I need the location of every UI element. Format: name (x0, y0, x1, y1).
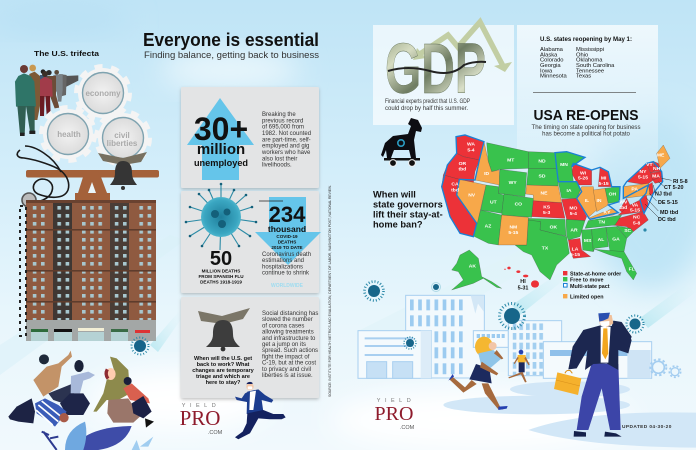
state labels: UT (490, 199, 497, 205)
question: when will state governors: home ban? (373, 220, 423, 230)
callouts: northeast states: CT 5-20 (664, 185, 683, 191)
state labels: ID (484, 171, 490, 177)
state labels: TX (542, 245, 549, 251)
text: question (192, 356, 255, 386)
state labels: IL (585, 198, 589, 204)
state labels: GA (612, 236, 620, 242)
arrow: up (187, 98, 254, 180)
state labels: tbd (458, 167, 466, 173)
logo: Yield Pro left: PRO (180, 406, 220, 430)
low building (358, 331, 431, 378)
panel: states reopening (517, 25, 658, 180)
text: social distancing (262, 311, 318, 379)
state labels: MO (569, 205, 577, 211)
text: social distancing: slowed the number (262, 317, 313, 323)
GDP dollar letters: GDP (385, 30, 486, 109)
text: record: workers who have (261, 150, 311, 156)
text: GDP forecast: Financial experts predict that U.S. GDP (385, 99, 470, 105)
callouts: northeast states: RI 5-8 (673, 179, 688, 185)
gears (650, 359, 681, 377)
text: social distancing: fight the impact of (262, 354, 310, 360)
illustration: businessman with briefcase (554, 313, 632, 437)
panel: deaths (181, 183, 321, 293)
list: states column 1: Minnesota (540, 74, 568, 80)
state labels: AZ (485, 224, 491, 230)
green states (473, 143, 637, 280)
state labels: VA (632, 202, 639, 208)
logo: Yield Pro right: YIELD (377, 398, 415, 404)
state labels: WA (467, 142, 475, 148)
list: states column 1: Iowa (540, 68, 553, 74)
panel: when back to work (181, 297, 319, 398)
state labels: ND (538, 159, 546, 165)
virus (432, 282, 440, 292)
state labels: WY (509, 180, 517, 186)
panel: 30+ million unemployed (181, 87, 319, 188)
briefcase (554, 370, 581, 395)
subtitle: timing: The timing on state opening for business (532, 125, 640, 131)
icon: stethoscope (17, 146, 69, 207)
text: record: are part-time, self- (262, 137, 311, 143)
gears: economy, health, civil liberties (42, 66, 150, 164)
heading: USA re-opens: USA RE-OPENS (534, 107, 638, 124)
state labels: tbd (451, 188, 459, 194)
mid building (473, 321, 562, 376)
stat: 50 million: 50 (210, 248, 232, 270)
illustration: background woman (508, 350, 530, 382)
stat: 234 thousand: 234 (269, 202, 306, 227)
source note: SOURCE: INSTITUTE FOR HEALTH METRICS AND EVALUATION, DEPARTMENT OF LABOR, WASHINGTON POST, NATIONAL REVIEW. (328, 185, 332, 397)
callouts: northeast states: NJ tbd (655, 192, 672, 198)
illustration: queue of workers (15, 65, 78, 136)
state labels: 5-4 (467, 147, 475, 153)
text: social distancing: Social distancing has (262, 311, 318, 317)
state labels: ME (657, 153, 665, 159)
text: question: triage and which are (196, 374, 250, 380)
list: states column 1: Colorado (540, 58, 564, 64)
state labels: SD (539, 173, 546, 179)
question: when will state governors (373, 190, 443, 230)
orange states (457, 142, 670, 245)
panel: deaths: MILLION DEATHS (202, 268, 240, 274)
label: worldwide: WORLDWIDE (271, 283, 304, 289)
updated date: UPDATED 04-30-20 (622, 424, 672, 430)
red states (442, 135, 663, 258)
virus (364, 282, 384, 300)
callout leader lines (645, 178, 672, 217)
callouts: northeast states: MD tbd (660, 210, 678, 216)
state labels: AR (570, 228, 578, 234)
state labels: NC (633, 215, 641, 221)
state labels: KS (543, 204, 551, 210)
state labels: SC (624, 228, 632, 234)
state labels: 5-26 (578, 176, 588, 182)
list: states column 2: South Carolina (576, 63, 615, 69)
state labels: 5-15 (599, 181, 609, 187)
legend: stay at home: State-at-home order (570, 272, 622, 278)
viruses: floating (364, 228, 647, 349)
building (20, 200, 156, 341)
text: coronavirus estimates: continue to shrink (262, 271, 310, 277)
legend: free to move: Free to move (570, 278, 604, 284)
text: social distancing: liberties is at issue. (262, 373, 313, 379)
virus (500, 304, 524, 328)
text: record: previous record (262, 118, 303, 124)
title: Everyone is essential (143, 30, 319, 50)
panel: states reopening: has become a political hot potato (542, 132, 631, 138)
state labels: 5-15 (570, 252, 580, 258)
state labels: 5-15 (638, 175, 648, 181)
state labels: IA (566, 188, 572, 194)
text: question: here to stay? (206, 380, 241, 386)
virus (643, 228, 647, 232)
illustration: city buildings (358, 295, 696, 448)
callouts: northeast states: DE 5-15 (658, 200, 678, 206)
text: coronavirus estimates: hospitalizations (262, 264, 303, 270)
heading: the U.S. trifecta: The U.S. trifecta (34, 49, 100, 58)
logo: Yield Pro left: .COM (208, 430, 223, 436)
state labels: NM (509, 224, 517, 230)
state labels: MI (601, 175, 607, 181)
state labels: MS (584, 238, 592, 244)
logo: Yield Pro right (375, 398, 415, 431)
icon: small virus by building (132, 338, 148, 354)
text: question: changes are temporary (192, 368, 255, 374)
state labels: 5-4 (570, 211, 577, 217)
tall building (406, 295, 484, 378)
subtitle: Finding balance, getting back to business (144, 50, 319, 61)
state labels: AL (598, 237, 604, 243)
legend: limited open: Limited open (570, 294, 604, 300)
panel: deaths: DEATHS (278, 240, 296, 244)
panel: 30+ million unemployed: million (197, 141, 245, 158)
list: states column 1: Georgia (540, 63, 561, 69)
logo: Yield Pro right: .COM (400, 425, 415, 431)
state labels: CO (515, 202, 522, 208)
text: record: livelihoods. (262, 163, 292, 169)
gear: economy: economy (85, 89, 121, 98)
gear: health: health (57, 130, 81, 139)
logo: Yield Pro left (180, 403, 223, 436)
state labels: LA (572, 247, 579, 253)
state labels: MN (560, 162, 568, 168)
gear: civil liberties: civil (114, 131, 130, 140)
state labels: MT (507, 158, 514, 164)
text: record (261, 112, 311, 169)
text: coronavirus estimates (262, 252, 311, 277)
text: record: Breaking the (262, 112, 296, 118)
list: states column 1: Alaska (540, 52, 558, 58)
text: coronavirus estimates: Coronavirus death (262, 252, 311, 258)
map: USA states (442, 135, 672, 290)
panel: deaths: thousand (268, 224, 306, 234)
question: when will state governors: When will (373, 190, 416, 200)
text: record: 1982. Not counted (262, 131, 311, 137)
text: social distancing: C-19, but at the cost (262, 361, 316, 367)
icon: coronavirus (185, 183, 257, 250)
logo: Yield Pro left: YIELD (182, 403, 220, 409)
text: social distancing: to privacy and civil (262, 367, 311, 373)
gear: civil liberties: liberties (107, 139, 138, 148)
decorative handshake (388, 62, 486, 73)
text: coronavirus estimates: estimations and (262, 258, 304, 264)
panel: GDP: could drop by half this summer. (385, 106, 468, 112)
logo: Yield Pro right: PRO (375, 403, 413, 425)
Hawaii (504, 267, 539, 288)
list: states column 2: Mississippi (576, 47, 604, 53)
panel: deaths: DEATHS 1918-1919 (200, 280, 242, 284)
state labels: WI (580, 170, 587, 176)
panel: deaths: COVID-19 (276, 234, 298, 239)
icon: trojan horse (381, 118, 422, 166)
stat: 30+: 30+ (194, 111, 248, 147)
state labels: MA (652, 174, 660, 180)
text: record: of 695,000 from (262, 125, 304, 131)
list: states column 2: Ohio (576, 52, 588, 58)
text: question: back to work? What (197, 362, 250, 368)
icon: liberty bell (198, 308, 250, 351)
state labels: OK (550, 224, 557, 230)
Alaska label: AK (469, 263, 476, 269)
question: when will state governors: lift their stay-at- (373, 210, 443, 220)
list: states column 2: Tennessee (576, 68, 604, 74)
label: Hawaii date (518, 279, 528, 292)
illustration: worried business people (8, 351, 154, 450)
icon: liberty bell on seesaw (98, 152, 147, 190)
callouts: northeast states: DC tbd (658, 217, 676, 223)
title (143, 30, 319, 61)
illustration: running man with mask (235, 382, 286, 439)
panel: deaths: 2019 TO DATE (271, 245, 303, 250)
Alaska (452, 250, 502, 290)
list: states column 1: Alabama (540, 47, 564, 53)
state labels: 5-15 (630, 208, 640, 214)
state labels: WV (619, 200, 628, 206)
state labels: OH (609, 192, 616, 198)
text: record: employed and gig (262, 144, 309, 150)
state labels: VT (646, 162, 653, 168)
state labels: NY (640, 169, 647, 175)
state labels (451, 142, 665, 272)
ground shadows (443, 381, 696, 448)
text: question: When will the U.S. get (194, 356, 252, 362)
state labels: TN (598, 220, 605, 226)
label: Hawaii date: 5-31 (518, 286, 528, 292)
question: when will state governors: state governors (373, 200, 443, 210)
state labels: 5-3 (543, 210, 550, 216)
state labels: OR (459, 161, 466, 167)
legend: multi-state: Multi-state pact (570, 284, 610, 290)
text: record: also lost their (262, 156, 297, 162)
list: states column 2: Oklahoma (576, 58, 603, 64)
multi-state pact outline (442, 135, 663, 237)
list: states column 2: Texas (576, 74, 591, 80)
leaves (42, 422, 153, 450)
state labels: KY (604, 210, 611, 216)
gear: civil liberties (96, 112, 150, 164)
state labels: IN (596, 198, 602, 204)
text: social distancing: spread. Such actions (262, 348, 318, 354)
list: states column 1 (540, 47, 568, 80)
text: social distancing: get a jump on its (262, 342, 306, 348)
state labels: PA (631, 187, 638, 193)
state labels: CA (451, 182, 459, 188)
arrow: falling GDP (413, 22, 512, 72)
legend (563, 271, 622, 300)
panel: 30+ million unemployed: unemployed (194, 158, 248, 168)
text: social distancing: allowing treatments (262, 330, 314, 336)
state labels: NH (653, 166, 661, 172)
arrow: down (255, 197, 321, 265)
virus (626, 316, 644, 332)
state labels: NE (541, 191, 548, 197)
arrow: scale pointer (259, 200, 283, 202)
text: social distancing: of corona cases (262, 323, 304, 329)
state labels: 5-15 (508, 230, 519, 236)
illustration: running woman (448, 337, 508, 410)
seesaw balance (26, 170, 159, 201)
panel: deaths: FROM SPANISH FLU (198, 274, 244, 279)
state labels: FL (629, 266, 635, 272)
label: Hawaii date: HI (520, 279, 526, 285)
state labels: 5-8 (633, 220, 640, 226)
panel: GDP (373, 22, 514, 125)
text: social distancing: and infrastructure to (262, 336, 316, 342)
state labels: NV (468, 193, 476, 199)
virus (404, 337, 416, 349)
heading: states reopening: U.S. states reopening by May 1: (540, 36, 632, 43)
callouts: northeast states (655, 179, 688, 223)
list: states column 2 (576, 47, 615, 80)
state labels: tbd (619, 205, 627, 211)
wide building (543, 342, 652, 378)
